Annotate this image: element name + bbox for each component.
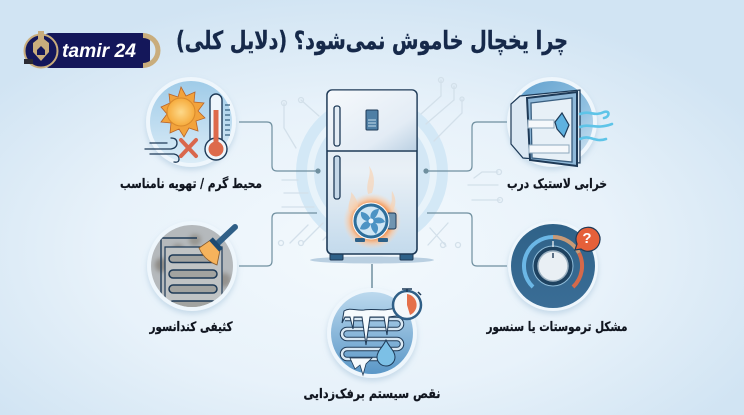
label: door gasket: خرابی لاستیک درب: [507, 177, 607, 192]
connectors: [239, 122, 507, 288]
panel: door gasket: [507, 77, 612, 167]
center halo: [296, 96, 448, 248]
logo: tamir 24: [24, 31, 160, 68]
refrigerator: [310, 90, 434, 264]
panel: dirty condenser: [147, 221, 237, 311]
panel: hot ambient / ventilation: [145, 77, 236, 167]
label: hot ambient: محیط گرم / تهویه نامناسب: [120, 176, 262, 192]
icon: hot fan motor: [343, 166, 401, 249]
label: thermostat: مشکل ترموستات یا سنسور: [486, 320, 628, 335]
icon: brush: [199, 227, 235, 265]
icon: thermometer: [205, 94, 230, 160]
icon: cold air: [580, 112, 612, 140]
icon: wind and cross: [145, 138, 196, 162]
title: چرا یخچال خاموش نمی‌شود؟ (دلایل کلی): [176, 26, 568, 56]
label: defrost system: نقص سیستم برفک‌زدایی: [304, 387, 440, 402]
icon: question badge: ?: [582, 230, 592, 247]
icon: water drop: [377, 340, 395, 366]
label: dirty condenser: کثیفی کندانسور: [149, 320, 233, 335]
icon: control display: [366, 110, 378, 130]
panel: defrost system: [327, 288, 421, 378]
icon: stopwatch: [393, 289, 421, 319]
panel: thermostat: [508, 221, 600, 311]
icon: sun: [161, 87, 205, 137]
logo: tamir 24: tamir 24: [62, 40, 136, 62]
circuit decorations: [278, 78, 502, 248]
